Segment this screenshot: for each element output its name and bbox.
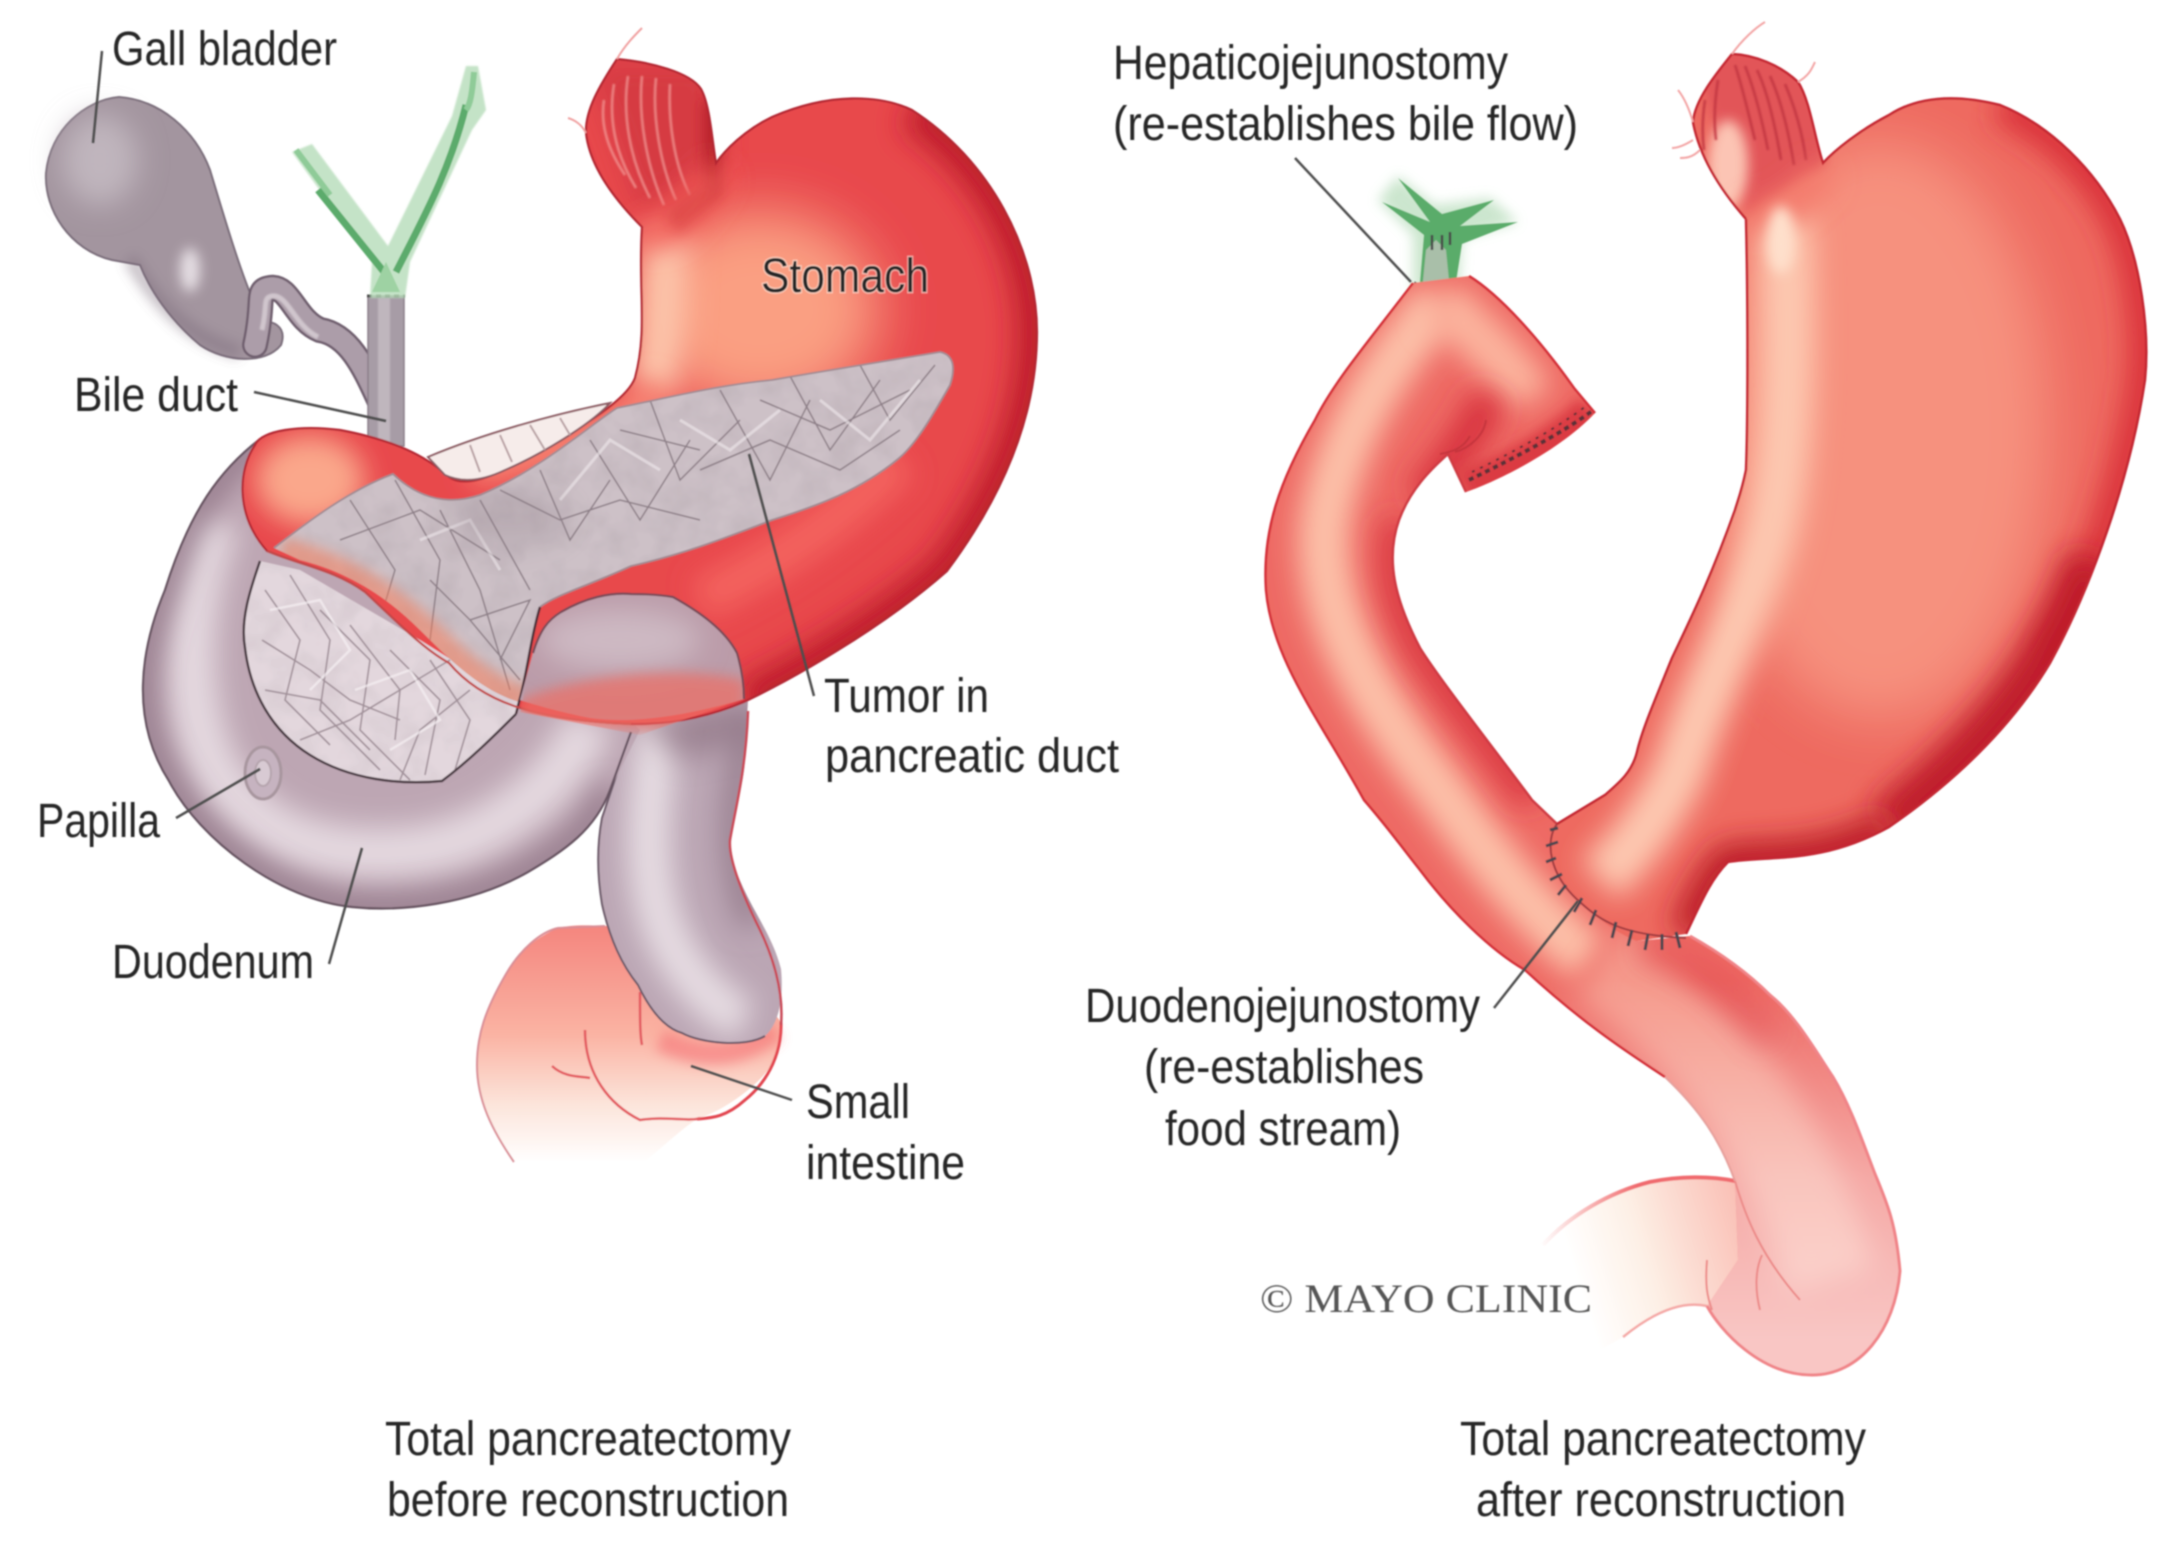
caption: before reconstruction: Total pancreatectomy <box>385 1413 791 1466</box>
leader lines <box>93 51 1578 1100</box>
panel: before reconstruction anatomy <box>46 28 1037 1175</box>
label: duodenojejunostomy: (re-establishes <box>1144 1041 1424 1094</box>
label: duodenojejunostomy: Duodenojejunostomy <box>1085 980 1480 1033</box>
jejunum, right <box>1265 276 1920 1390</box>
label: tumor in pancreatic duct: Tumor in <box>824 670 989 723</box>
gall bladder <box>46 97 379 400</box>
label: gall bladder: Gall bladder <box>112 23 337 76</box>
jejunal fold, right <box>1543 1177 1760 1350</box>
caption: after reconstruction: Total pancreatectomy <box>1460 1413 1866 1466</box>
label: hepaticojejunostomy: (re-establishes bile flow) <box>1113 98 1578 151</box>
label: small intestine: intestine <box>806 1137 965 1190</box>
pancreas body with tumor <box>267 345 960 724</box>
pancreas head <box>240 555 530 790</box>
stomach, left <box>242 28 1037 724</box>
caption: after reconstruction: after reconstruction <box>1476 1474 1846 1527</box>
caption: before reconstruction: before reconstruction <box>387 1474 789 1527</box>
small intestine, left <box>477 920 781 1175</box>
label: stomach: Stomach <box>761 250 929 303</box>
papilla <box>245 747 281 799</box>
label: duodenojejunostomy: food stream) <box>1165 1103 1401 1156</box>
hepatic duct stump, green <box>1378 176 1518 293</box>
staple line on jejunal stump <box>1469 406 1592 480</box>
label: papilla: Papilla <box>37 795 160 848</box>
copyright: © MAYO CLINIC <box>1260 1276 1592 1321</box>
hepatic ducts: green branches <box>292 66 486 298</box>
duodenum <box>143 439 640 908</box>
label: small intestine: Small <box>806 1076 910 1129</box>
bile duct tube <box>367 296 405 446</box>
label: tumor in pancreatic duct: pancreatic duct <box>825 730 1119 783</box>
panel: after reconstruction anatomy <box>1265 22 2146 1390</box>
duodenojejunal suture line <box>1546 824 1686 950</box>
label: duodenum: Duodenum <box>112 936 314 989</box>
jejunum limb, left <box>598 700 782 1043</box>
stomach, right <box>1551 22 2146 941</box>
label: bile duct: Bile duct <box>74 369 238 422</box>
label: hepaticojejunostomy: Hepaticojejunostomy <box>1113 37 1508 90</box>
pancreas tail behind stomach <box>428 403 610 480</box>
duodenum loop over stomach <box>520 594 745 730</box>
